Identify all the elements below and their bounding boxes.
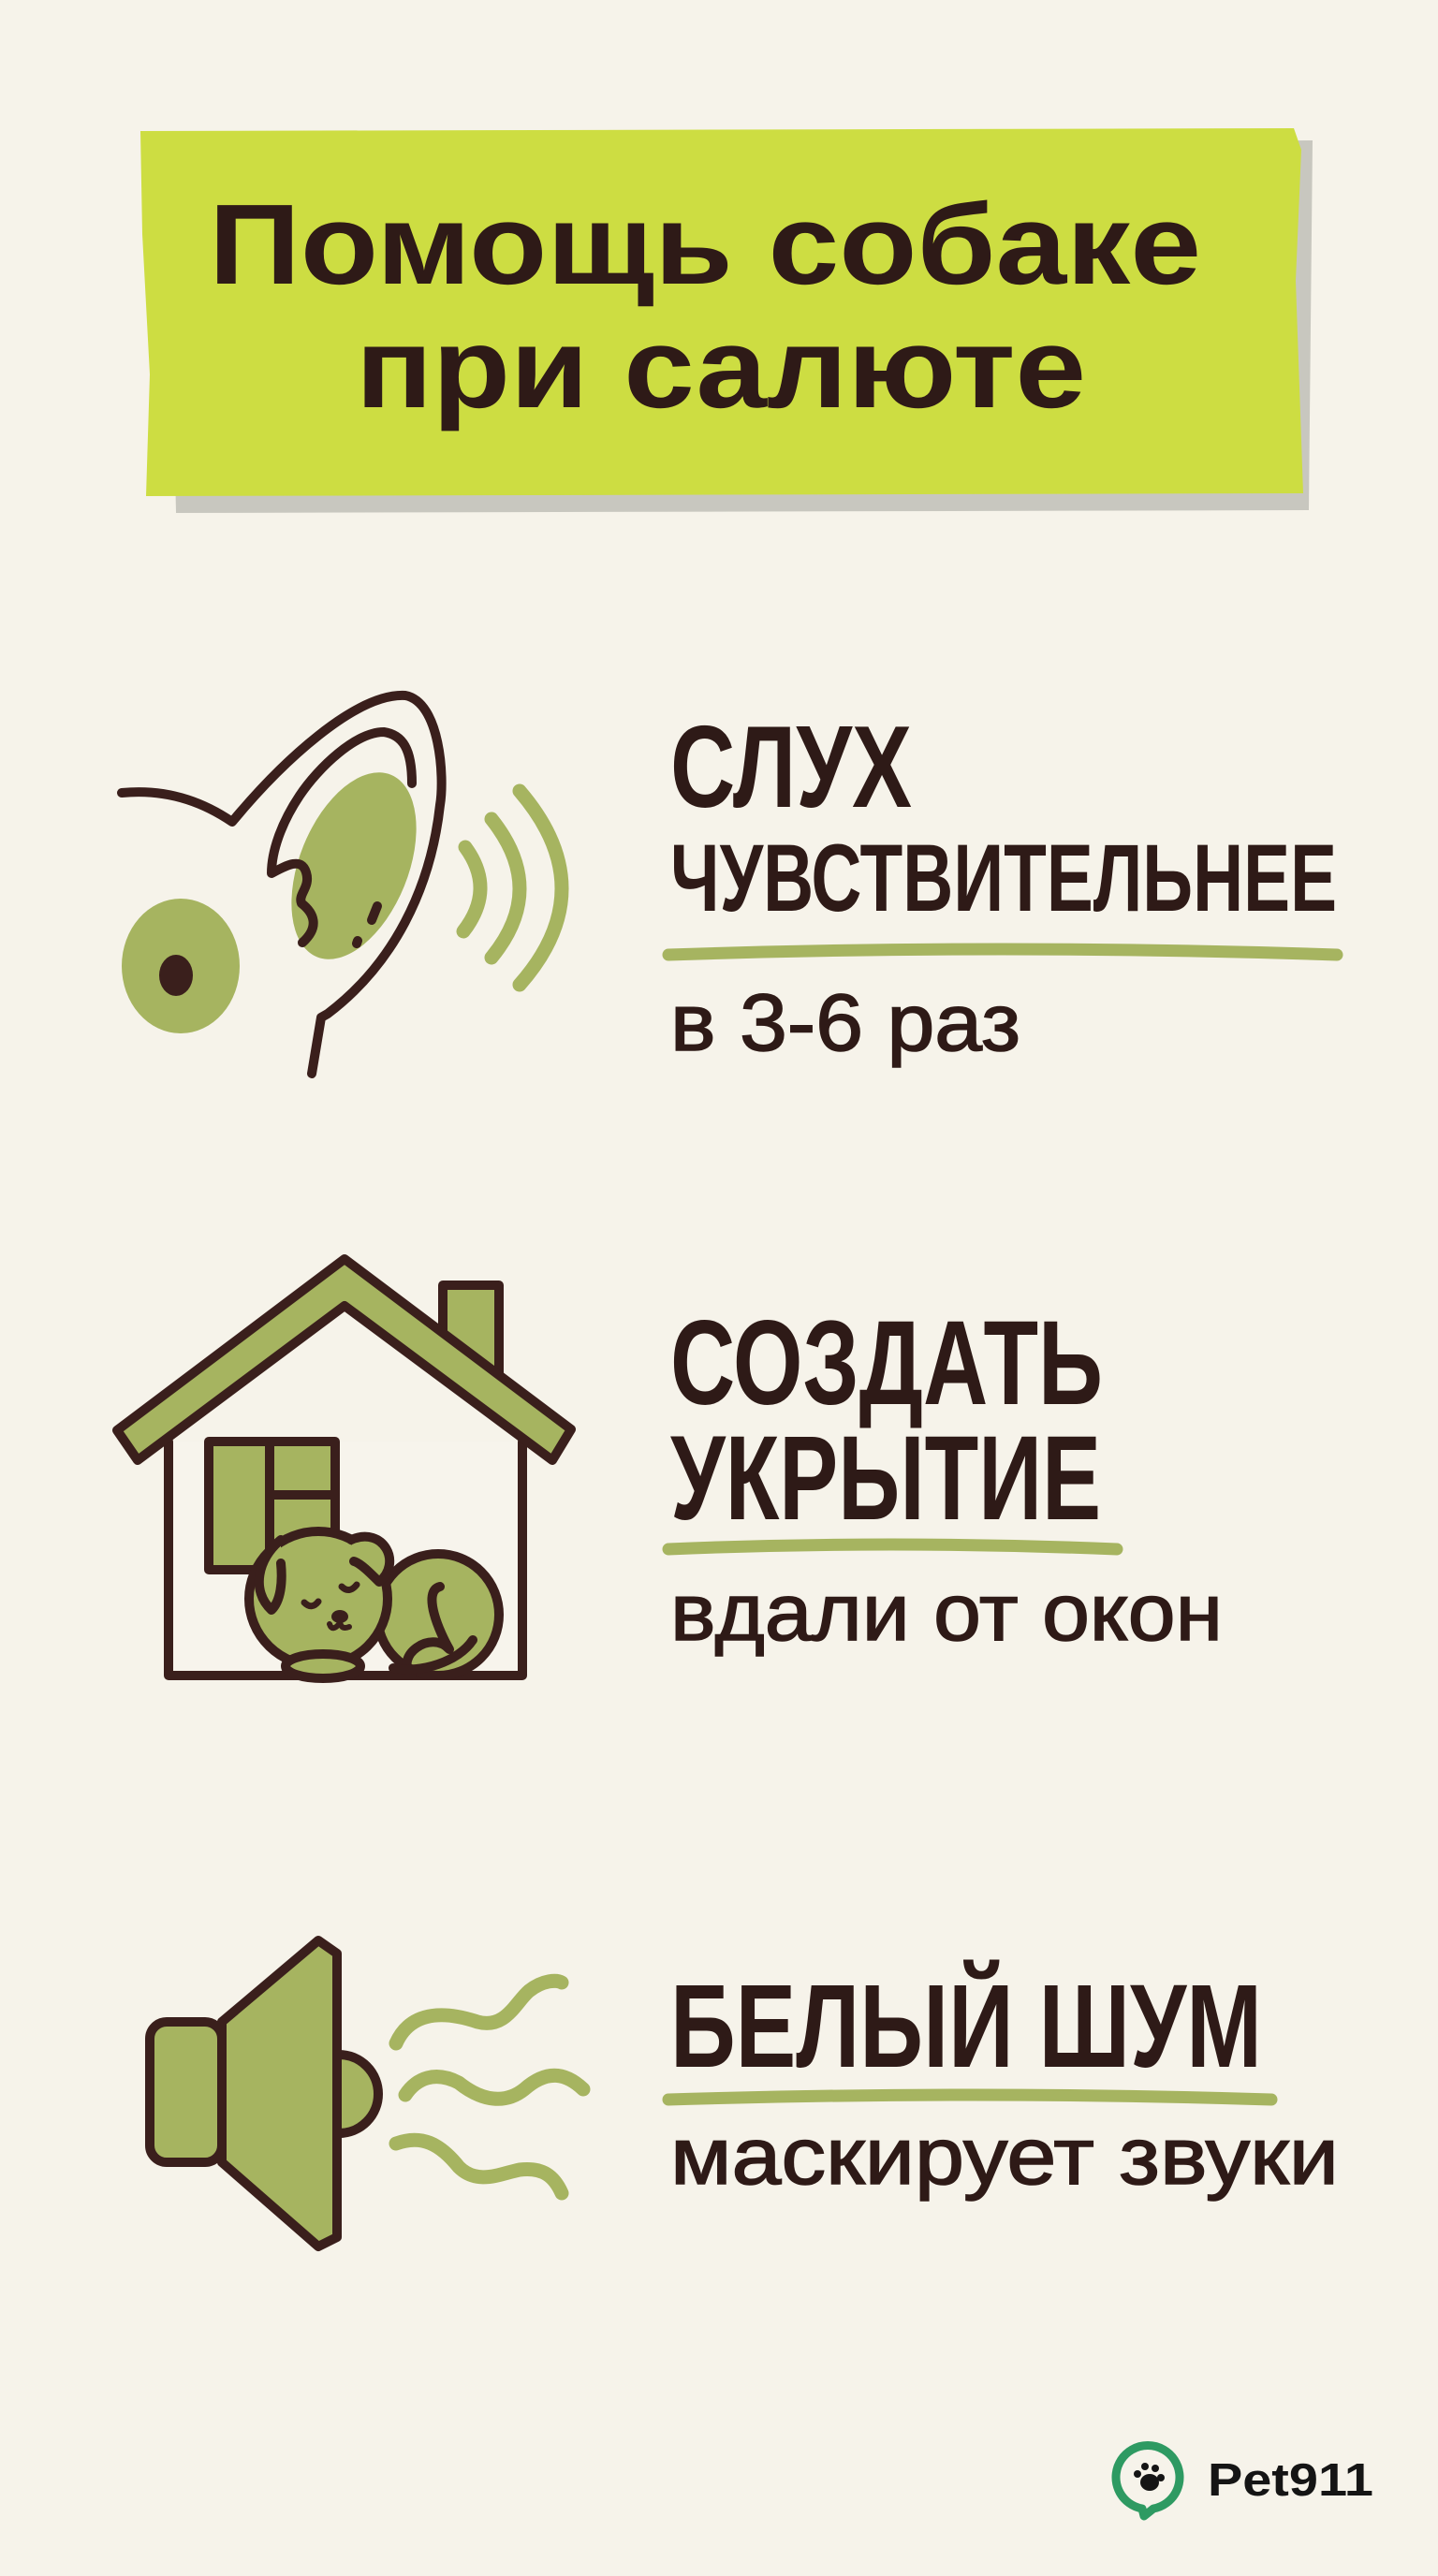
icon: dog ear <box>122 695 562 1074</box>
text block: white noise: БЕЛЫЙ ШУМ <box>670 1959 1262 2092</box>
text block: shelter: СОЗДАТЬ <box>670 1296 1103 1430</box>
text block: hearing: СЛУХ <box>670 703 912 832</box>
text block: shelter: вдали от окон <box>670 1568 1223 1658</box>
sound waves <box>463 791 562 985</box>
text block: white noise: маскирует звуки <box>670 2112 1339 2202</box>
title: при салюте <box>356 304 1086 432</box>
text block: hearing: в 3-6 раз <box>670 978 1020 1068</box>
text block: hearing <box>668 703 1337 1068</box>
icon: house with sleeping dog <box>117 1259 571 1678</box>
text block: shelter <box>668 1296 1223 1658</box>
logo: Pet911: Pet911 <box>1208 2455 1373 2506</box>
logo: Pet911 <box>1116 2446 1373 2516</box>
title banner <box>140 128 1313 513</box>
icon: speaker with white noise <box>150 1940 583 2247</box>
text block: white noise <box>668 1959 1339 2202</box>
text block: shelter: УКРЫТИЕ <box>670 1412 1101 1545</box>
title: Помощь собаке <box>209 181 1201 308</box>
